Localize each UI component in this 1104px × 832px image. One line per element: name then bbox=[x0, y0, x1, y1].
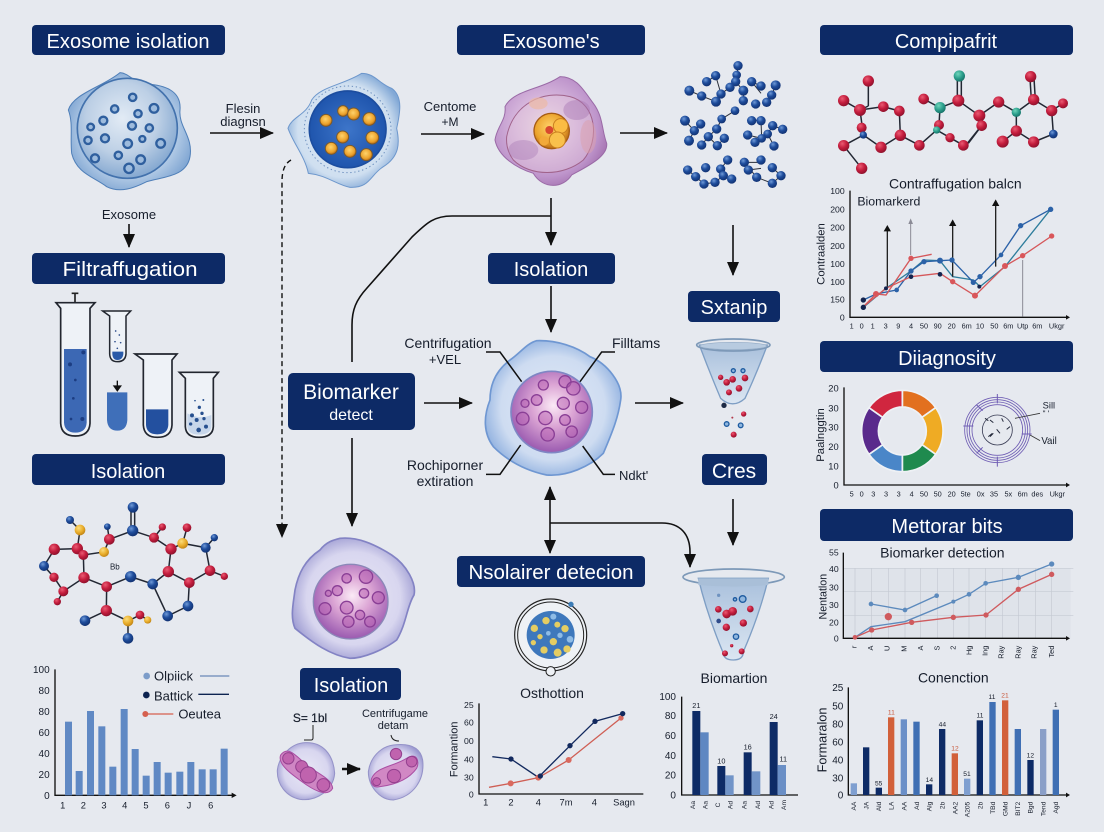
label: Osthottion: Osthottion bbox=[520, 685, 584, 701]
chart: line chart bottom center: Sagn bbox=[613, 798, 635, 808]
chart: Conenction bar chart: GMd bbox=[1002, 801, 1009, 816]
label: Centrifugame detam: detam bbox=[378, 720, 408, 732]
banner: Filtraffugation: Filtraffugation bbox=[62, 259, 198, 281]
banner: Compipafrit: Compipafrit bbox=[895, 31, 998, 53]
chart: bottom left bar chart: 20 bbox=[39, 770, 50, 781]
chart: donut and radial diagram: 50 bbox=[920, 490, 928, 499]
chart: donut and radial diagram: Ukgr bbox=[1050, 490, 1066, 499]
chart: grouped bar chart bottom center: Ad bbox=[768, 801, 775, 809]
chart: Conenction bar chart: 1 bbox=[1054, 702, 1058, 709]
chart: Biomarker detection line chart: A bbox=[916, 646, 925, 651]
banner: Isolation left bbox=[32, 454, 225, 485]
chart: Conenction bar chart: 55 bbox=[875, 781, 883, 788]
chart: bottom left bar chart: Oeutea bbox=[178, 707, 222, 722]
icon: ring organelle bbox=[515, 599, 587, 676]
chart: donut and radial diagram: 30 bbox=[828, 423, 839, 433]
arrow: molecule network down bbox=[732, 225, 734, 275]
chart: Biomarker detection line chart: Ray bbox=[1030, 645, 1039, 659]
icon: bottom cell bbox=[292, 538, 414, 658]
chart: Conenction bar chart: JA bbox=[864, 801, 871, 809]
banner: Mettorar bits bbox=[820, 509, 1073, 541]
chart: grouped bar chart bottom center: 24 bbox=[770, 712, 778, 721]
chart: donut and radial diagram: 30 bbox=[828, 403, 839, 413]
chart: line chart bottom center bbox=[449, 700, 643, 808]
chart: bottom left bar chart: Olpiick bbox=[154, 669, 193, 684]
label: Flesin diagnsn: Flesin bbox=[226, 101, 260, 116]
label: Centrifugame detam: Centrifugame bbox=[362, 708, 428, 720]
chart: Contraffugation line chart: 1 bbox=[850, 321, 854, 330]
label: Centrifugation +VEL bbox=[404, 335, 492, 367]
chart: bottom left bar chart bbox=[33, 665, 237, 810]
chart: Biomarker detection line chart: Hg bbox=[964, 646, 973, 655]
chart: line chart bottom center: Formantion bbox=[449, 722, 461, 777]
chart: Contraffugation line chart: 6m bbox=[962, 321, 972, 330]
chart: grouped bar chart bottom center: 11 bbox=[780, 754, 787, 763]
label: Filltams: Filltams bbox=[612, 335, 660, 351]
chart: Biomarker detection line chart: 2 bbox=[949, 646, 958, 650]
chart: Conenction bar chart: 14 bbox=[926, 777, 933, 784]
chart: Conenction bar chart: BIT2 bbox=[1015, 801, 1022, 816]
chart: bottom left bar chart: 80 bbox=[39, 707, 50, 718]
chart: donut and radial diagram bbox=[815, 383, 1070, 499]
chart: grouped bar chart bottom center: 0 bbox=[670, 790, 676, 801]
chart: bottom left bar chart: 3 bbox=[101, 800, 107, 810]
chart: Conenction bar chart: A205 bbox=[964, 801, 971, 817]
banner: Cres bbox=[702, 454, 767, 485]
banner: Isolation left: Isolation bbox=[91, 461, 165, 483]
chart: grouped bar chart bottom center: 80 bbox=[665, 711, 676, 722]
chart: Conenction bar chart: 11 bbox=[989, 694, 996, 701]
chart: Biomarker detection line chart: 20 bbox=[829, 617, 839, 627]
chart: donut and radial diagram: des bbox=[1031, 490, 1044, 499]
chart: donut and radial diagram: 10 bbox=[828, 461, 839, 471]
chart: Contraffugation line chart: 4 bbox=[909, 321, 913, 330]
chart: Biomarker detection line chart: Ing bbox=[980, 646, 989, 656]
chart: Biomarker detection line chart: 55 bbox=[829, 548, 839, 558]
chart: Biomarker detection line chart: 30 bbox=[829, 600, 839, 610]
chart: donut and radial diagram: " ' bbox=[1043, 410, 1050, 419]
chart: Conenction bar chart: 50 bbox=[832, 701, 844, 712]
chart: grouped bar chart bottom center: 60 bbox=[665, 731, 676, 742]
chart: Biomarker detection line chart: M bbox=[899, 646, 908, 652]
chart: bottom left bar chart: 6 bbox=[165, 800, 170, 810]
chart: donut and radial diagram: 20 bbox=[828, 442, 839, 452]
chart: bottom left bar chart: 60 bbox=[39, 728, 50, 739]
chart: Contraffugation line chart: 200 bbox=[830, 205, 845, 215]
chart: line chart bottom center: 25 bbox=[464, 700, 474, 710]
chart: Conenction bar chart: 12 bbox=[951, 746, 959, 753]
chart: Biomarker detection line chart: Nentatlon bbox=[818, 574, 830, 619]
chart: Contraffugation line chart: 6m bbox=[1032, 321, 1042, 330]
label: Centrifugation +VEL: +VEL bbox=[429, 352, 461, 367]
chart: grouped bar chart bottom center: Ad bbox=[728, 801, 735, 809]
arrow: exosome down bbox=[128, 224, 130, 247]
chart: Conenction bar chart: AA bbox=[901, 801, 908, 811]
chart: Conenction bar chart: Tend bbox=[1040, 801, 1047, 816]
chart: Conenction bar chart: LA bbox=[889, 801, 896, 810]
chart: Contraffugation line chart: 100 bbox=[830, 186, 845, 196]
chart: donut and radial diagram: 5 bbox=[850, 490, 854, 499]
banner: Isolation bottom: Isolation bbox=[314, 675, 388, 697]
chart: Biomarker detection line chart: S bbox=[933, 646, 942, 651]
chart: donut and radial diagram: 3 bbox=[897, 490, 901, 499]
chart: Conenction bar chart: Alg bbox=[927, 801, 934, 811]
arrow: biomarker down bbox=[351, 438, 353, 526]
chart: Conenction bar chart: 30 bbox=[832, 773, 844, 784]
label: S=1bl bbox=[293, 711, 327, 740]
chart: Contraffugation line chart bbox=[816, 175, 1070, 330]
chart: Contraffugation line chart: 100 bbox=[830, 277, 845, 287]
chart: Conenction bar chart: 21 bbox=[1001, 692, 1009, 699]
chart: grouped bar chart bottom center: 16 bbox=[744, 743, 752, 752]
chart: grouped bar chart bottom center: Ad bbox=[755, 801, 762, 809]
chart: Contraffugation line chart: 200 bbox=[830, 223, 845, 233]
banner: Biomarker detect bbox=[288, 373, 415, 430]
chart: Conenction bar chart: 40 bbox=[832, 755, 844, 766]
chart: donut and radial diagram: 3 bbox=[871, 490, 875, 499]
arrow: connector to biomarker bbox=[352, 216, 551, 362]
chart: Conenction bar chart: 51 bbox=[963, 771, 971, 778]
chart: Conenction bar chart: 2b bbox=[977, 801, 984, 809]
chart: bottom left bar chart: J bbox=[187, 800, 191, 810]
chart: donut and radial diagram: Vail bbox=[1041, 436, 1057, 447]
chart: Contraffugation line chart: 150 bbox=[830, 295, 845, 305]
chart: Biomarker detection line chart: 40 bbox=[829, 564, 839, 574]
arrow: cres down bbox=[732, 499, 734, 545]
chart: Contraffugation line chart: 3 bbox=[884, 321, 888, 330]
label: Ndkt: Ndkt' bbox=[619, 468, 648, 483]
chart: Conenction bar chart: TBd bbox=[990, 801, 997, 814]
chart: line chart bottom center: 00 bbox=[464, 736, 474, 746]
chart: Contraffugation line chart: 9 bbox=[896, 321, 900, 330]
chart: donut and radial diagram: 5x bbox=[1004, 490, 1013, 499]
banner: Exosome's: Exosome's bbox=[502, 31, 600, 53]
chart: Contraffugation line chart: 20 bbox=[948, 321, 956, 330]
banner: Sxtanip bbox=[688, 291, 780, 322]
banner: Isolation center: Isolation bbox=[514, 259, 588, 281]
arrow: biomarker to cell bbox=[424, 402, 472, 404]
chart: Conenction bar chart: 11 bbox=[977, 713, 984, 720]
chart: line chart bottom center: 4 bbox=[536, 798, 541, 808]
chart: Contraffugation line chart: 50 bbox=[990, 321, 998, 330]
chart: line chart bottom center: 7m bbox=[560, 798, 573, 808]
chart: grouped bar chart bottom center: C bbox=[715, 802, 722, 807]
chart: Contraffugation line chart: 90 bbox=[934, 321, 942, 330]
label: Rochiporner extiration bbox=[407, 457, 483, 489]
banner: Filtraffugation bbox=[32, 253, 225, 284]
chart: bottom left bar chart: 5 bbox=[143, 800, 149, 810]
chart: Biomarker detection line chart: A bbox=[866, 646, 875, 651]
chart: Biomarker detection line chart bbox=[818, 544, 1073, 659]
banner: Nsolairer detecion bbox=[457, 556, 645, 587]
chart: Contraffugation line chart: 1 bbox=[871, 321, 875, 330]
label: Centome +M bbox=[424, 99, 476, 129]
chart: donut and radial diagram: 6m bbox=[1018, 490, 1028, 499]
chart: donut and radial diagram: 0 bbox=[833, 480, 839, 490]
chart: donut and radial diagram: 0 bbox=[860, 490, 864, 499]
banner: Mettorar bits: Mettorar bits bbox=[891, 516, 1003, 538]
arrow: cell to cell bbox=[210, 132, 273, 134]
banner: Exosome isolation: Exosome isolation bbox=[46, 31, 210, 53]
chart: Conenction bar chart: 44 bbox=[939, 721, 946, 728]
chart: Biomarker detection line chart: Ted bbox=[1047, 646, 1056, 657]
icon: small cell right bbox=[368, 744, 423, 800]
arrow: dashed route bbox=[282, 160, 291, 537]
chart: line chart bottom center: 2 bbox=[508, 798, 514, 808]
arrow: double headed vertical bbox=[549, 487, 551, 553]
chart: bottom left bar chart: 6 bbox=[208, 800, 213, 810]
arrow: to pink cell bbox=[421, 133, 484, 135]
icon: test tubes bbox=[56, 293, 218, 437]
banner: Biomarker detect: detect bbox=[329, 407, 373, 424]
chart: bottom left bar chart: 1 bbox=[60, 800, 65, 810]
banner: Diiagnosity: Diiagnosity bbox=[898, 348, 996, 370]
banner: Cres: Cres bbox=[712, 460, 756, 483]
label: Centome +M: +M bbox=[441, 115, 459, 129]
chart: Biomarker detection line chart: U bbox=[883, 646, 892, 651]
chart: Conenction bar chart: Conenction bbox=[918, 669, 989, 685]
chart: grouped bar chart bottom center bbox=[659, 692, 798, 810]
chart: donut and radial diagram: 4 bbox=[910, 490, 914, 499]
chart: Conenction bar chart: 11 bbox=[888, 710, 895, 717]
chart: Biomarker detection line chart: Biomarker detection bbox=[880, 544, 1005, 560]
chart: Contraffugation line chart: Utp bbox=[1017, 321, 1028, 330]
chart: donut and radial diagram: 0x bbox=[977, 490, 985, 499]
chart: grouped bar chart bottom center: 40 bbox=[665, 751, 676, 762]
chart: Contraffugation line chart: 0 bbox=[840, 312, 845, 322]
chart: Conenction bar chart: 60 bbox=[832, 737, 844, 748]
chart: donut and radial diagram: Paalnggtin bbox=[815, 408, 827, 462]
banner: Exosome's bbox=[457, 25, 645, 55]
chart: Contraffugation line chart: Ukgr bbox=[1049, 321, 1065, 330]
label: Centrifugame detam bbox=[362, 708, 428, 741]
chart: bottom left bar chart: 4 bbox=[122, 800, 127, 810]
chart: grouped bar chart bottom center: 100 bbox=[659, 692, 676, 703]
chart: donut and radial diagram: Sill bbox=[1043, 401, 1055, 411]
chart: grouped bar chart bottom center: Aa bbox=[742, 801, 749, 809]
chart: Contraffugation line chart: 100 bbox=[830, 259, 845, 269]
icon: exosome cell, top left bbox=[68, 73, 190, 190]
chart: donut and radial diagram: 5te bbox=[961, 490, 971, 499]
chart: Conenction bar chart: Agd bbox=[1053, 801, 1060, 814]
chart: Contraffugation line chart: 10 bbox=[976, 321, 984, 330]
chart: donut and radial diagram: 50 bbox=[934, 490, 942, 499]
label: Exosome: Exosome bbox=[102, 207, 156, 222]
chart: Biomarker detection line chart: Ray bbox=[1014, 645, 1023, 659]
chart: Conenction bar chart: 0 bbox=[838, 791, 844, 802]
chart: donut and radial diagram: 35 bbox=[990, 490, 998, 499]
chart: donut and radial diagram: 20 bbox=[828, 383, 839, 393]
icon: central cell with labels bbox=[485, 341, 621, 475]
chart: grouped bar chart bottom center: Aa bbox=[702, 801, 709, 809]
icon: pink exosome with orange nucleus bbox=[495, 77, 607, 185]
chart: Biomarker detection line chart: 0 bbox=[834, 634, 839, 644]
chart: line chart bottom center: 30 bbox=[464, 773, 474, 783]
chart: Conenction bar chart bbox=[816, 669, 1070, 817]
banner: Isolation center bbox=[488, 253, 615, 284]
arrow: pink cell to isolation bbox=[550, 198, 552, 245]
banner: Diiagnosity bbox=[820, 341, 1073, 372]
chart: bottom left bar chart: 2 bbox=[81, 800, 86, 810]
chart: Contraffugation line chart: 50 bbox=[920, 321, 928, 330]
chart: Contraffugation line chart: 200 bbox=[830, 241, 845, 251]
chart: bottom left bar chart: 0 bbox=[44, 791, 50, 802]
chart: donut and radial diagram: 20 bbox=[948, 490, 956, 499]
banner: Biomarker detect: Biomarker bbox=[303, 381, 399, 404]
chart: Biomarker detection line chart: r bbox=[850, 645, 859, 648]
chart: bottom left bar chart: 100 bbox=[33, 665, 50, 676]
icon: lower funnel bbox=[683, 569, 784, 660]
label: Centome +M: Centome bbox=[424, 99, 476, 114]
chart: Conenction bar chart: Formaralon bbox=[816, 708, 830, 772]
icon: left molecule bbox=[39, 502, 228, 644]
arrow: to molecule network bbox=[620, 132, 667, 134]
chart: grouped bar chart bottom center: Aa bbox=[690, 801, 697, 809]
chart: Contraffugation line chart: 6m bbox=[1003, 321, 1013, 330]
icon: red and teal molecule, top right bbox=[838, 70, 1068, 174]
chart: Contraffugation line chart: Contraffugation balcn bbox=[889, 175, 1022, 191]
icon: left molecule: Bb bbox=[110, 562, 120, 571]
chart: Conenction bar chart: AA bbox=[851, 801, 858, 811]
icon: small cell left bbox=[277, 743, 335, 800]
arrow: cell to funnel bbox=[635, 402, 683, 404]
chart: line chart bottom center: 40 bbox=[464, 754, 474, 764]
chart: Conenction bar chart: 12 bbox=[1027, 753, 1034, 760]
chart: Biomarker detection line chart: Ray bbox=[996, 645, 1005, 659]
label: Biomartion: Biomartion bbox=[701, 670, 767, 686]
chart: Conenction bar chart: Ald bbox=[876, 801, 883, 811]
label: Centrifugation +VEL: Centrifugation bbox=[404, 335, 492, 351]
chart: Conenction bar chart: Bgd bbox=[1028, 801, 1035, 814]
chart: Contraffugation line chart: 0 bbox=[860, 321, 864, 330]
icon: upper funnel bbox=[697, 339, 770, 438]
label: Rochiporner extiration: Rochiporner bbox=[407, 457, 483, 473]
chart: bottom left bar chart: Battick bbox=[154, 689, 193, 704]
banner: Nsolairer detecion: Nsolairer detecion bbox=[468, 562, 634, 584]
icon: navy molecule network bbox=[680, 61, 787, 189]
chart: Conenction bar chart: 80 bbox=[832, 719, 844, 730]
chart: bottom left bar chart: 40 bbox=[39, 749, 50, 760]
label: Flesin diagnsn: diagnsn bbox=[220, 114, 266, 129]
chart: line chart bottom center: 1 bbox=[483, 798, 488, 808]
chart: Conenction bar chart: AA2 bbox=[952, 801, 959, 814]
label: Rochiporner extiration: extiration bbox=[417, 473, 473, 489]
label: S=1bl: S= 1bl bbox=[293, 711, 327, 725]
chart: Contraffugation line chart: Contraalden bbox=[816, 223, 828, 285]
chart: Conenction bar chart: 2b bbox=[940, 801, 947, 809]
arrow: small cell to small cell bbox=[342, 768, 360, 770]
chart: Biomarker detection line chart: 30 bbox=[829, 582, 839, 592]
chart: bottom left bar chart: 80 bbox=[39, 686, 50, 697]
chart: Conenction bar chart: Ad bbox=[914, 801, 921, 810]
chart: Contraffugation line chart: Biomarkerd bbox=[857, 195, 921, 209]
arrow: isolation to cell bbox=[550, 286, 552, 332]
chart: line chart bottom center: 60 bbox=[464, 718, 474, 728]
label: Flesin diagnsn bbox=[220, 101, 266, 129]
chart: Conenction bar chart: 25 bbox=[832, 683, 844, 694]
arrow: curved to lower funnel bbox=[550, 523, 690, 567]
chart: grouped bar chart bottom center: Am bbox=[781, 800, 788, 810]
chart: grouped bar chart bottom center: 10 bbox=[717, 757, 725, 766]
chart: line chart bottom center: 0 bbox=[469, 789, 474, 799]
icon: exosome with golden vesicles bbox=[288, 73, 400, 187]
banner: Exosome isolation bbox=[32, 25, 225, 55]
banner: Sxtanip: Sxtanip bbox=[701, 297, 767, 319]
chart: grouped bar chart bottom center: 21 bbox=[692, 701, 700, 710]
banner: Isolation bottom bbox=[300, 668, 401, 700]
chart: line chart bottom center: 4 bbox=[592, 798, 597, 808]
chart: donut and radial diagram: 3 bbox=[884, 490, 888, 499]
banner: Compipafrit bbox=[820, 25, 1073, 55]
chart: grouped bar chart bottom center: 20 bbox=[665, 771, 676, 782]
